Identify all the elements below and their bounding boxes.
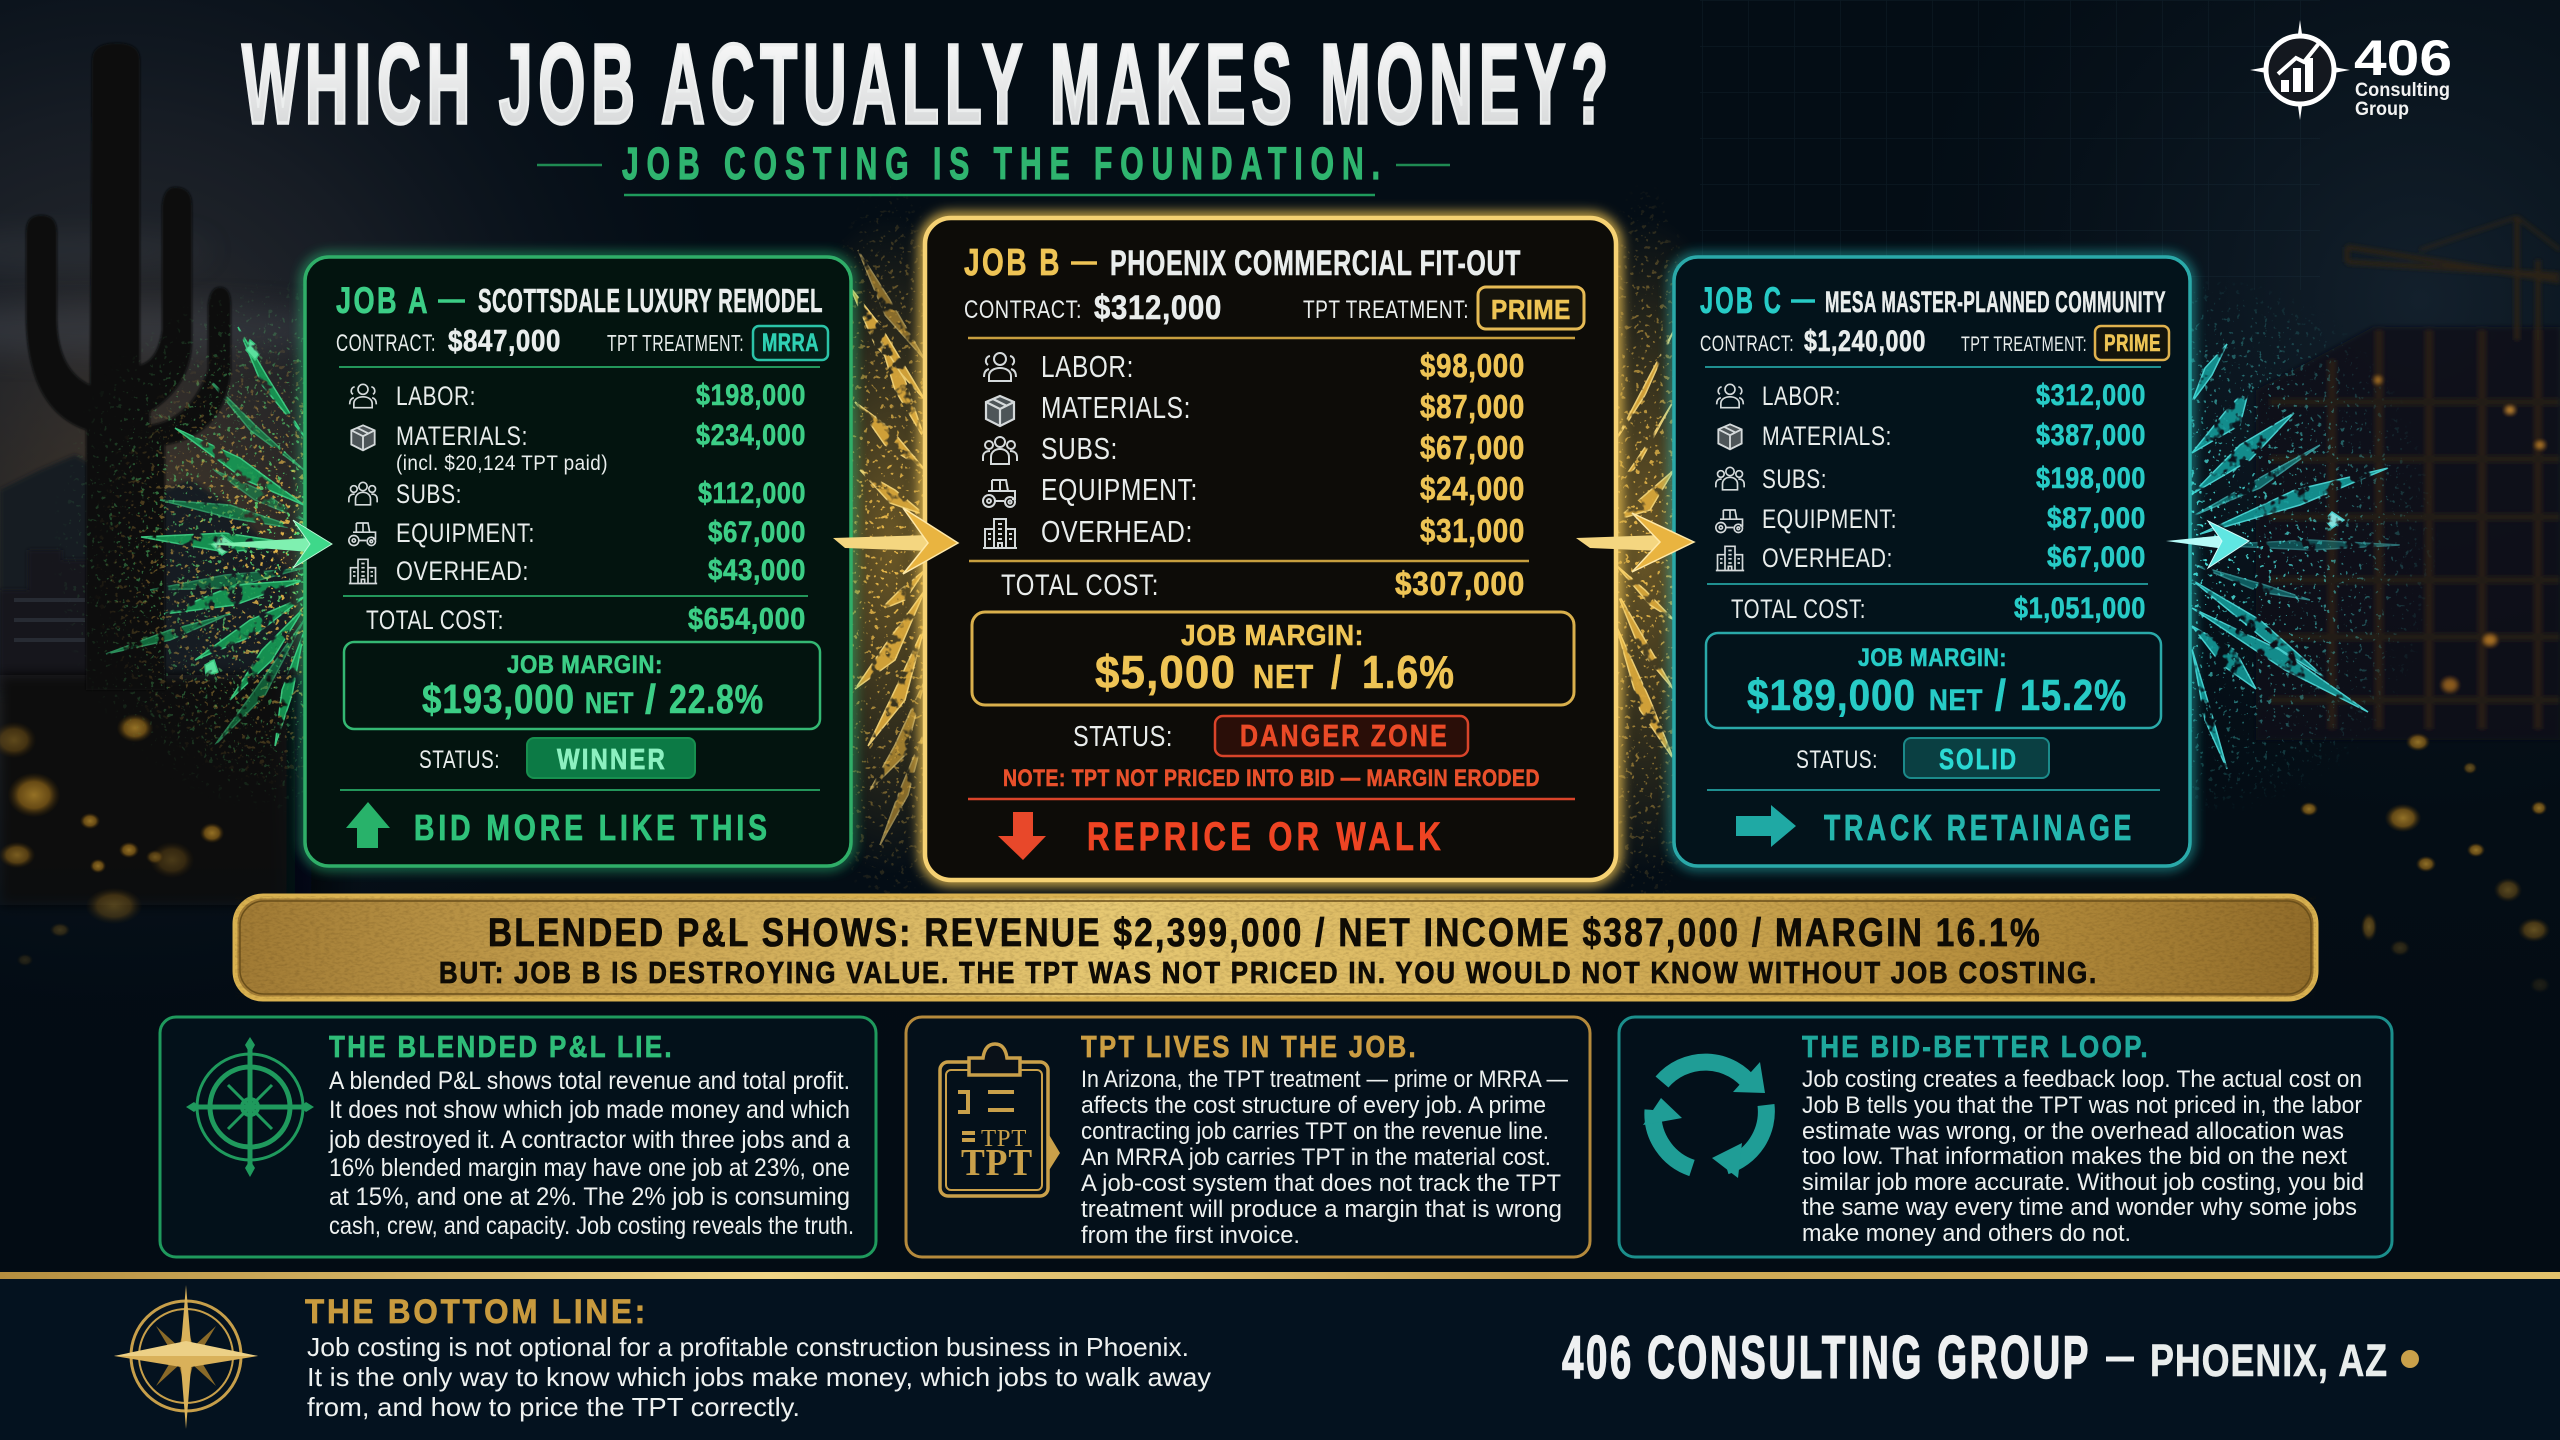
job margin box: $193,000 [422,676,575,722]
body text: at 15%, and one at 2%. The 2% job is consuming [329,1183,850,1211]
cost rows: $67,000 [1420,429,1525,466]
logo: 406 Consulting Group [2250,20,2452,120]
cost rows: SUBS: [1762,464,1827,494]
total cost [366,601,806,636]
panel: TPT lives in the job: TPT LIVES IN THE JOB. [1081,1029,1418,1064]
body text: estimate was wrong, or the overhead allocation was [1802,1118,2344,1145]
body text [1081,1066,1568,1249]
icon: clipboard: TPT [981,1126,1027,1152]
banner: blended P&L [235,896,2316,999]
burst: green shards left of Job A [106,327,304,746]
job margin box: $189,000 [1747,671,1916,720]
total cost [1001,565,1525,602]
arrow: teal out of Job C [2166,521,2249,568]
contract line: TPT TREATMENT: [1961,333,2087,356]
total cost [1731,592,2146,625]
cost rows: EQUIPMENT: [396,518,535,548]
logo: 406 Consulting Group: 406 [2354,30,2452,86]
logo: 406 Consulting Group: Consulting [2355,80,2450,101]
contract line: CONTRACT: [336,330,436,357]
job margin box: 22.8% [669,676,764,722]
cost rows: $198,000 [696,379,806,412]
contract line: PRIME [2104,330,2161,357]
body text: An MRRA job carries TPT in the material cost. [1081,1144,1551,1171]
gold coins left [0,714,224,966]
lower scene fade [0,860,2560,1280]
total cost: TOTAL COST: [1001,569,1159,602]
icon: clipboard: TPT [961,1142,1033,1184]
job margin box: NET [585,687,634,720]
cost rows: $43,000 [708,554,806,587]
bottom line text: THE BOTTOM LINE: [305,1293,648,1331]
status: danger zone: STATUS: [1073,721,1173,753]
burst: gold shards between Job A and Job B [850,250,925,845]
panel: the blended P&L lie [160,1017,876,1257]
bottom line text [305,1293,1211,1422]
body text: Job costing creates a feedback loop. The actual cost on [1802,1066,2362,1093]
cost rows: (incl. $20,124 TPT paid) [396,452,608,475]
heading: Job B: PHOENIX COMMERCIAL FIT-OUT [1110,244,1521,283]
cost rows: $312,000 [2036,379,2146,412]
contract line [336,323,828,360]
status: solid [1796,738,2049,778]
status: solid: SOLID [1939,744,2018,776]
cost rows [983,347,1525,549]
body text: Job B tells you that the TPT was not priced in, the labor [1802,1092,2362,1119]
cost rows: MATERIALS: [1762,421,1892,451]
action: reprice or walk [998,812,1445,860]
status: winner: STATUS: [419,746,500,774]
body text: similar job more accurate. Without job costing, you bid [1802,1169,2364,1196]
job margin box: $5,000 [1095,646,1236,698]
gold coins right [2300,733,2550,993]
body text: make money and others do not. [1802,1220,2131,1247]
total cost: TOTAL COST: [366,605,504,635]
body text: treatment will produce a margin that is wrong [1081,1196,1562,1223]
job margin box: JOB MARGIN: [1181,620,1364,652]
cost rows: SUBS: [1041,431,1118,466]
cost rows: OVERHEAD: [396,556,529,586]
bottom line text: It is the only way to know which jobs make money, which jobs to walk away [307,1362,1211,1392]
banner: blended P&L: BUT: JOB B IS DESTROYING VALUE. THE TPT WAS NOT PRICED IN. YOU WOULD NOT KNOW WITHOUT JOB COSTING. [439,955,2098,990]
body text: the same way every time and wonder why some jobs [1802,1194,2357,1221]
status: winner [419,738,695,778]
job margin box: / [1995,671,2007,720]
job margin box: JOB MARGIN: [507,651,663,679]
speckle particles [40,170,2460,930]
total cost: $1,051,000 [2014,592,2146,625]
logo: 406 Consulting Group: Group [2355,99,2409,120]
body text: job destroyed it. A contractor with three jobs and a [328,1126,850,1154]
contract line: TPT TREATMENT: [607,330,744,356]
cost rows: $387,000 [2036,419,2146,452]
body text: In Arizona, the TPT treatment — prime or MRRA — [1081,1066,1568,1093]
icon: loop arrows [1643,1062,1766,1178]
cost rows: SUBS: [396,479,462,509]
cost rows: EQUIPMENT: [1041,472,1198,507]
arrow: gold from Job A to Job B [833,508,958,574]
burst: teal shards right of Job C [2192,344,2400,769]
body text: It does not show which job made money and which [329,1096,850,1124]
body text: A job-cost system that does not track the TPT [1081,1170,1561,1197]
job margin box [344,642,820,729]
total cost: $307,000 [1395,565,1525,602]
cost rows: LABOR: [1762,381,1841,411]
job margin box [972,612,1574,705]
desert landscape with saguaro cactus [0,43,360,905]
job margin box: JOB MARGIN: [1858,644,2007,672]
status: danger zone: DANGER ZONE [1240,718,1449,753]
cost rows: MATERIALS: [1041,390,1191,425]
action: track retainage [1736,805,2135,848]
total cost: $654,000 [688,601,806,636]
heading: Job A: SCOTTSDALE LUXURY REMODEL [478,282,823,319]
cost rows: $198,000 [2036,462,2146,495]
icon: compass [186,1037,314,1177]
cost rows: $24,000 [1420,470,1525,507]
body text [328,1067,854,1240]
status: winner: WINNER [557,744,667,776]
action: reprice or walk: REPRICE OR WALK [1087,815,1445,859]
body text [1802,1066,2364,1247]
cost rows: $67,000 [2047,541,2146,574]
cost rows: LABOR: [396,381,476,411]
contract line: $312,000 [1094,289,1222,327]
banner: blended P&L: BLENDED P&L SHOWS: REVENUE $2,399,000 / NET INCOME $387,000 / MARGIN 16.1% [488,911,2042,955]
cost rows [1716,379,2146,574]
heading: Job C: MESA MASTER-PLANNED COMMUNITY [1825,286,2166,319]
bottom line text: Job costing is not optional for a profitable construction business in Phoenix. [307,1332,1189,1362]
contract line: $1,240,000 [1804,325,1926,358]
panel: the bid-better loop [1619,1017,2392,1257]
cost rows: $87,000 [2047,502,2146,535]
panel: Job C [1674,257,2190,866]
heading: Job C [1700,280,2166,321]
cost rows: MATERIALS: [396,421,528,451]
arrow: gold from Job B to Job C [1576,513,1694,572]
body text: from the first invoice. [1081,1222,1300,1249]
job margin box: NET [1929,684,1983,717]
status: danger zone [1073,716,1468,756]
body text: contracting job carries TPT on the revenue line. [1081,1118,1549,1145]
job margin box [1706,633,2161,728]
arrow: green into Job A [207,520,332,568]
icon: gold compass star [114,1285,258,1429]
contract line: TPT TREATMENT: [1303,296,1469,324]
panel: Job A [305,257,851,866]
contract line: CONTRACT: [1700,331,1794,356]
cost rows: $31,000 [1420,512,1525,549]
heading: Job C: JOB C [1700,280,1783,321]
cost rows: LABOR: [1041,349,1134,384]
icon: clipboard [940,1044,1060,1196]
job margin box: / [1331,646,1342,698]
body text: A blended P&L shows total revenue and total profit. [329,1067,850,1095]
construction site with crane [2256,217,2560,740]
action: bid more like this: BID MORE LIKE THIS [414,807,771,848]
cost rows: $67,000 [708,516,806,549]
panel: the blended P&L lie: THE BLENDED P&L LIE. [329,1029,674,1064]
contract line: CONTRACT: [964,296,1082,324]
burst: gold shards between Job B and Job C [1616,330,1674,760]
action: track retainage: TRACK RETAINAGE [1824,807,2135,848]
job margin box: / [645,676,657,722]
panel: Job B [925,218,1616,880]
body text: too low. That information makes the bid on the next [1802,1143,2347,1170]
total cost: TOTAL COST: [1731,594,1866,624]
subtitle with rules: JOB COSTING IS THE FOUNDATION. [622,138,1388,189]
footer brand: 406 CONSULTING GROUP [1562,1324,2091,1391]
cost rows: OVERHEAD: [1762,543,1893,573]
contract line: MRRA [762,329,819,357]
heading: Job B: JOB B [964,242,1062,284]
heading: Job A: JOB A [336,280,430,321]
bottom line text: from, and how to price the TPT correctly. [307,1392,800,1422]
cost rows: $87,000 [1420,388,1525,425]
action: bid more like this [346,802,771,848]
heading: Job A [336,280,823,321]
job margin box: 15.2% [2020,671,2127,720]
job margin box: 1.6% [1362,646,1455,698]
note: NOTE: TPT NOT PRICED INTO BID — MARGIN ERODED [1003,765,1540,792]
footer band [0,1272,2560,1440]
cost rows: $98,000 [1420,347,1525,384]
cost rows: $112,000 [698,477,806,510]
job margin box: NET [1253,658,1314,695]
cost rows: $234,000 [696,419,806,452]
panel: the bid-better loop: THE BID-BETTER LOOP. [1802,1029,2150,1064]
contract line [964,287,1584,329]
contract line: PRIME [1491,294,1571,325]
cost rows: OVERHEAD: [1041,514,1193,549]
status: solid: STATUS: [1796,746,1878,774]
footer brand: PHOENIX, AZ [2150,1335,2388,1386]
contract line [1700,325,2169,360]
panel: TPT lives in the job [906,1017,1590,1257]
body text: cash, crew, and capacity. Job costing reveals the truth. [329,1212,854,1240]
cost rows [349,379,806,587]
body text: 16% blended margin may have one job at 23%, one [329,1154,850,1182]
contract line: $847,000 [448,323,561,358]
body text: affects the cost structure of every job. A prime [1081,1092,1546,1119]
cost rows: EQUIPMENT: [1762,504,1897,534]
heading: Job B [964,242,1521,284]
